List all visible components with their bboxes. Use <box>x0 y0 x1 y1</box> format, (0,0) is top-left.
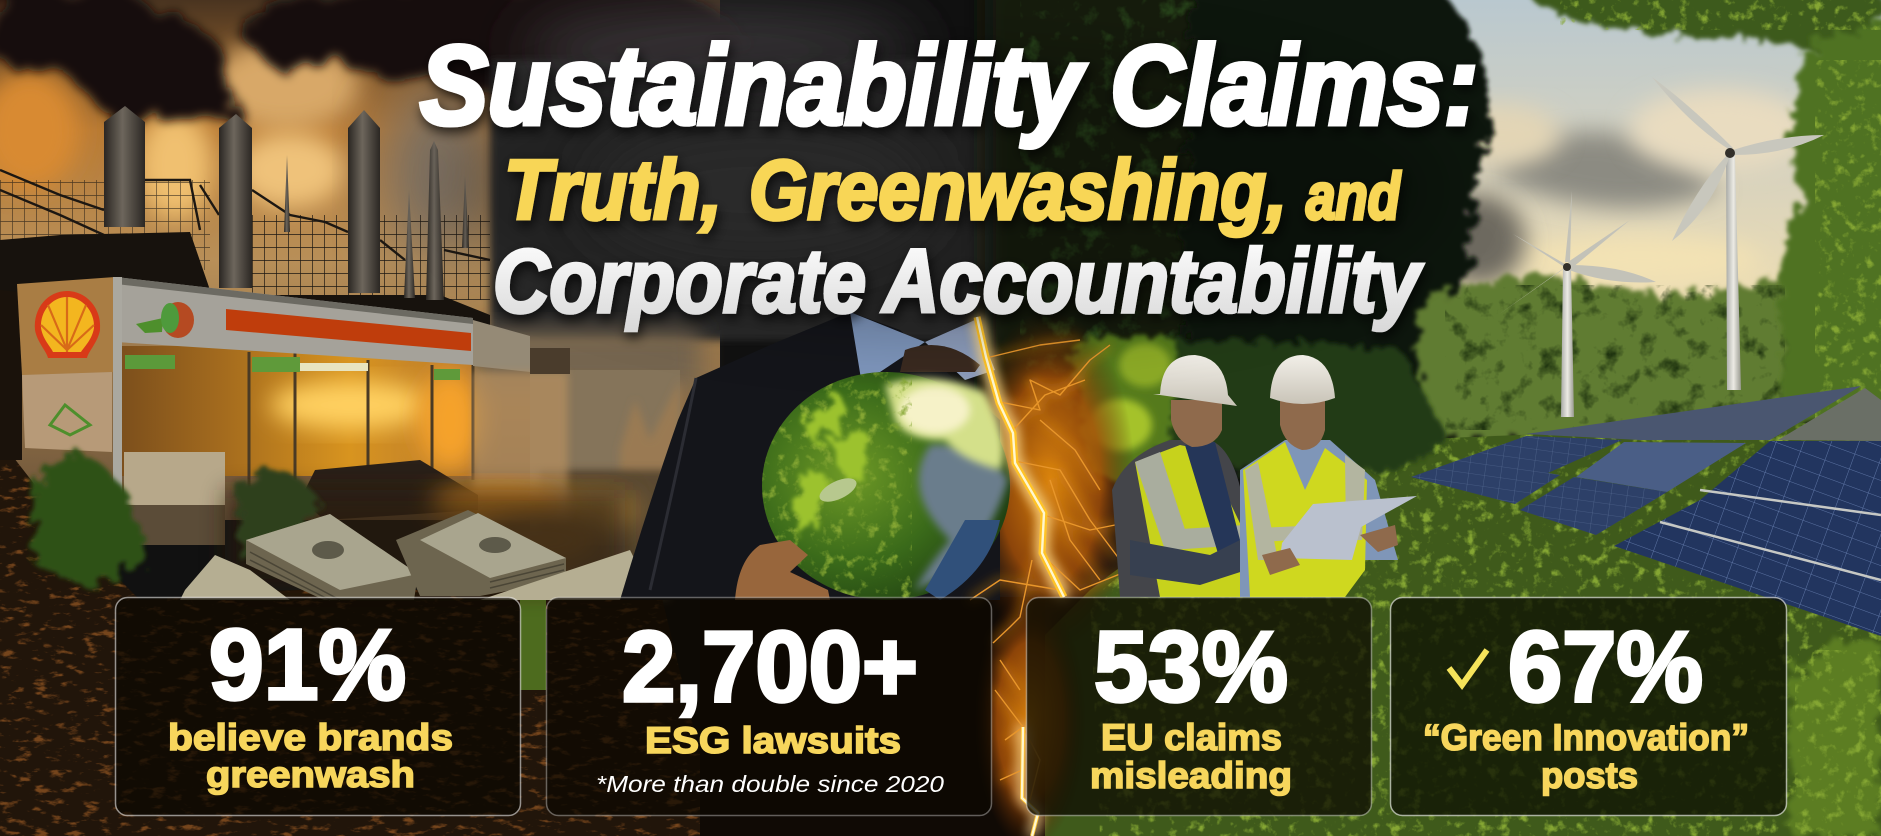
globe <box>762 372 1010 600</box>
middle solar panels <box>1576 442 1746 492</box>
title line 2: Truth, <box>504 143 722 237</box>
dark forest behind title <box>985 0 1485 460</box>
title line 3 <box>493 232 1423 332</box>
right sky <box>1435 0 1881 330</box>
blueprint sheet <box>1280 496 1417 560</box>
fire glow around the lightning <box>965 310 1135 836</box>
stat card: 67% <box>1390 598 1786 816</box>
lower sign panel <box>22 372 112 452</box>
stat card: 2,700+: 2,700+ <box>622 611 918 723</box>
helmet <box>1153 355 1237 406</box>
icon: shell logo <box>35 291 100 358</box>
refinery <box>0 106 490 340</box>
large solar panels <box>1614 441 1881 636</box>
title line 2 <box>504 143 1401 237</box>
counter <box>124 452 225 530</box>
hills <box>1420 275 1790 440</box>
stat card: 2,700+ <box>546 598 992 816</box>
shirt <box>850 312 925 385</box>
soil foreground <box>0 280 1045 836</box>
turbine far right <box>1652 77 1824 390</box>
stat card: 53%: EU claims <box>1101 717 1282 758</box>
turbine near <box>1498 191 1656 417</box>
lightning bolt <box>970 317 1140 836</box>
money stacks <box>180 510 650 600</box>
lettuce texture <box>762 372 912 600</box>
stat card: 2,700+: *More than double since 2020 <box>596 771 944 797</box>
plants at store base <box>30 455 320 590</box>
dark tree mass edge <box>1180 0 1491 430</box>
stat card: 53%: 53% <box>1094 611 1288 723</box>
solar array <box>1411 386 1881 636</box>
meadow <box>1040 420 1881 836</box>
storefront <box>17 277 625 590</box>
stat card: 91%: believe brands <box>168 717 453 758</box>
hazy ruined landscape <box>530 370 680 600</box>
left solar panels <box>1411 436 1622 504</box>
stat card: 67%: posts <box>1541 755 1638 796</box>
stat card: 91% <box>116 598 520 816</box>
store windows <box>121 346 482 490</box>
title line 3: Accountability <box>881 232 1423 332</box>
stat card: 67%: 67% <box>1508 611 1703 723</box>
suited executive <box>620 312 1000 600</box>
tie <box>900 345 980 372</box>
hand holding globe <box>735 540 830 600</box>
refinery scaffolding <box>250 215 490 300</box>
far solar panels <box>1526 386 1861 440</box>
title <box>420 23 1478 332</box>
refinery towers <box>104 106 469 300</box>
dark refinery base <box>0 232 490 340</box>
branches <box>970 340 1140 800</box>
left polluted sky <box>0 0 720 520</box>
tree canopy top right <box>1500 0 1881 420</box>
black smoke clouds <box>0 0 740 127</box>
stat card: 53%: misleading <box>1090 755 1292 796</box>
stat card: 53% <box>1026 598 1372 816</box>
suit jacket <box>620 312 1000 600</box>
loose bills <box>180 550 650 600</box>
side annex <box>473 320 570 522</box>
title line 3: Corporate <box>493 232 866 332</box>
ocean side <box>915 444 1008 590</box>
refinery pipes <box>0 170 490 260</box>
title line 1: Sustainability Claims: <box>420 23 1478 148</box>
worker two <box>1240 355 1417 597</box>
red stripe <box>226 309 471 351</box>
foreground foliage bottom right <box>1790 638 1881 836</box>
helmet <box>1270 355 1335 404</box>
stat card: 2,700+: ESG lawsuits <box>645 720 901 761</box>
workers <box>1112 355 1417 597</box>
fascia emblem <box>136 302 194 338</box>
bright continent <box>885 378 1004 470</box>
wind turbines <box>1498 77 1824 417</box>
title line 2: Greenwashing, <box>749 143 1287 237</box>
stack two <box>396 510 566 596</box>
dark central backdrop <box>470 10 1020 390</box>
stat card: 91%: greenwash <box>206 754 415 795</box>
fascia <box>116 277 473 365</box>
title shade <box>450 40 1450 340</box>
stat card: 67%: “Green Innovation” <box>1423 717 1749 758</box>
worker one <box>1112 355 1262 597</box>
stack one <box>246 514 418 600</box>
bright shrub beside worker <box>1070 334 1180 490</box>
title line 2: and <box>1306 159 1401 233</box>
icon: check mark <box>1449 650 1487 685</box>
sign column <box>17 277 115 375</box>
cars and interior <box>300 460 478 520</box>
stat card: 91%: 91% <box>209 609 406 721</box>
dark shrubs behind workers <box>1130 340 1450 470</box>
